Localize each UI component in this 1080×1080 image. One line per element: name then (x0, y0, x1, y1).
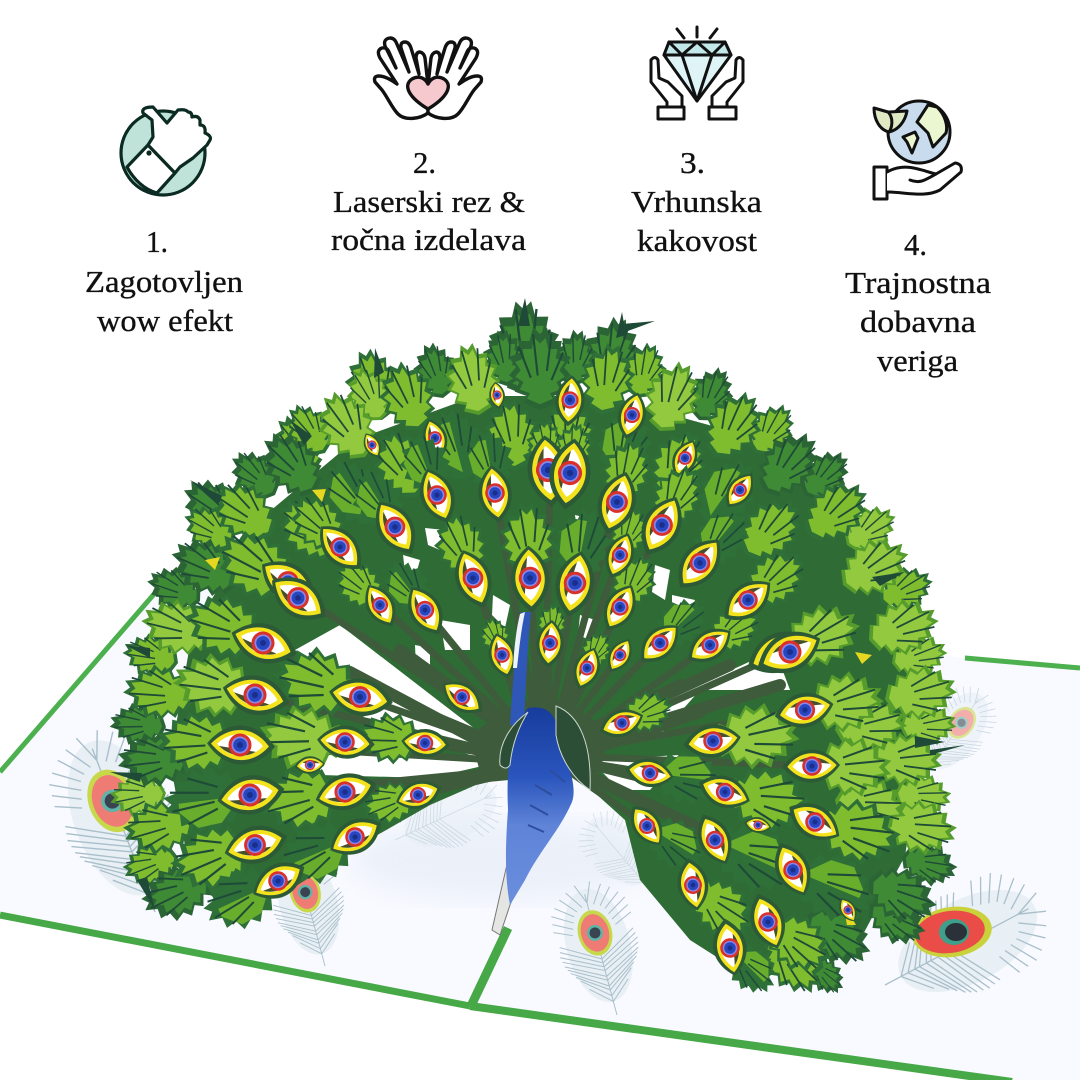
body feather marks (528, 770, 565, 832)
feather print: left (34, 714, 207, 932)
bird neck (510, 612, 531, 725)
label 2: ročna izdelava (331, 222, 526, 257)
yellow hidden feather tips (205, 489, 872, 925)
benefit 4 (845, 101, 991, 378)
label 1: Zagotovljen (85, 264, 244, 299)
bird body (506, 707, 574, 905)
feather print: behind bird right (567, 799, 671, 908)
bird leg and paper stand (492, 860, 520, 935)
label 3: 3. (680, 145, 705, 180)
neck highlight (513, 612, 525, 668)
eye feather leaves (156, 418, 906, 1004)
second ring of leaves (265, 397, 815, 574)
feather print: large right (861, 856, 1066, 1031)
feather print: top right (900, 674, 1008, 792)
label 3 (631, 145, 762, 258)
label 4: 4. (904, 227, 927, 262)
outer ring of leaves (118, 327, 961, 1007)
label 4 (845, 227, 991, 378)
benefit 2 (331, 38, 526, 257)
icon: hand with globe and leaves (874, 101, 961, 199)
icon: hands with diamond (651, 27, 743, 119)
tall top leaves carrying the spikes (171, 301, 647, 550)
feather spokes (240, 470, 815, 870)
fan hub (470, 700, 610, 782)
label 3: Vrhunska (631, 184, 762, 219)
feather print: bottom centre (543, 873, 656, 1025)
hidden top eyes (359, 374, 761, 514)
label 4: dobavna (860, 304, 976, 339)
label 2: Laserski rez & (333, 184, 525, 219)
open greeting card base (0, 578, 1080, 1080)
label 2: 2. (413, 145, 436, 180)
bird wing (556, 706, 590, 790)
feather print: behind bird left (381, 760, 514, 871)
label 4: veriga (877, 343, 958, 378)
benefit 1 (85, 107, 244, 338)
feather print: bottom left (259, 838, 360, 975)
benefit 3 (631, 27, 762, 258)
icon: wow thumbs up (121, 107, 210, 195)
rim of small leaves (108, 328, 962, 1002)
label 3: kakovost (637, 223, 757, 258)
label 2 (331, 145, 526, 257)
icon: hands with heart (374, 38, 482, 118)
label 1: 1. (146, 224, 168, 259)
peacock bird (492, 612, 590, 935)
peacock fan (108, 298, 965, 1007)
label 4: Trajnostna (845, 265, 991, 300)
wing left (500, 712, 528, 768)
printed peacock feathers on card (34, 674, 1066, 1031)
label 1: wow efekt (97, 303, 233, 338)
fan silhouette (170, 396, 920, 975)
tip spikes (110, 298, 965, 910)
peacock feather eyes (206, 433, 861, 979)
label 1 (85, 224, 244, 338)
white gaps between spokes (295, 515, 790, 790)
